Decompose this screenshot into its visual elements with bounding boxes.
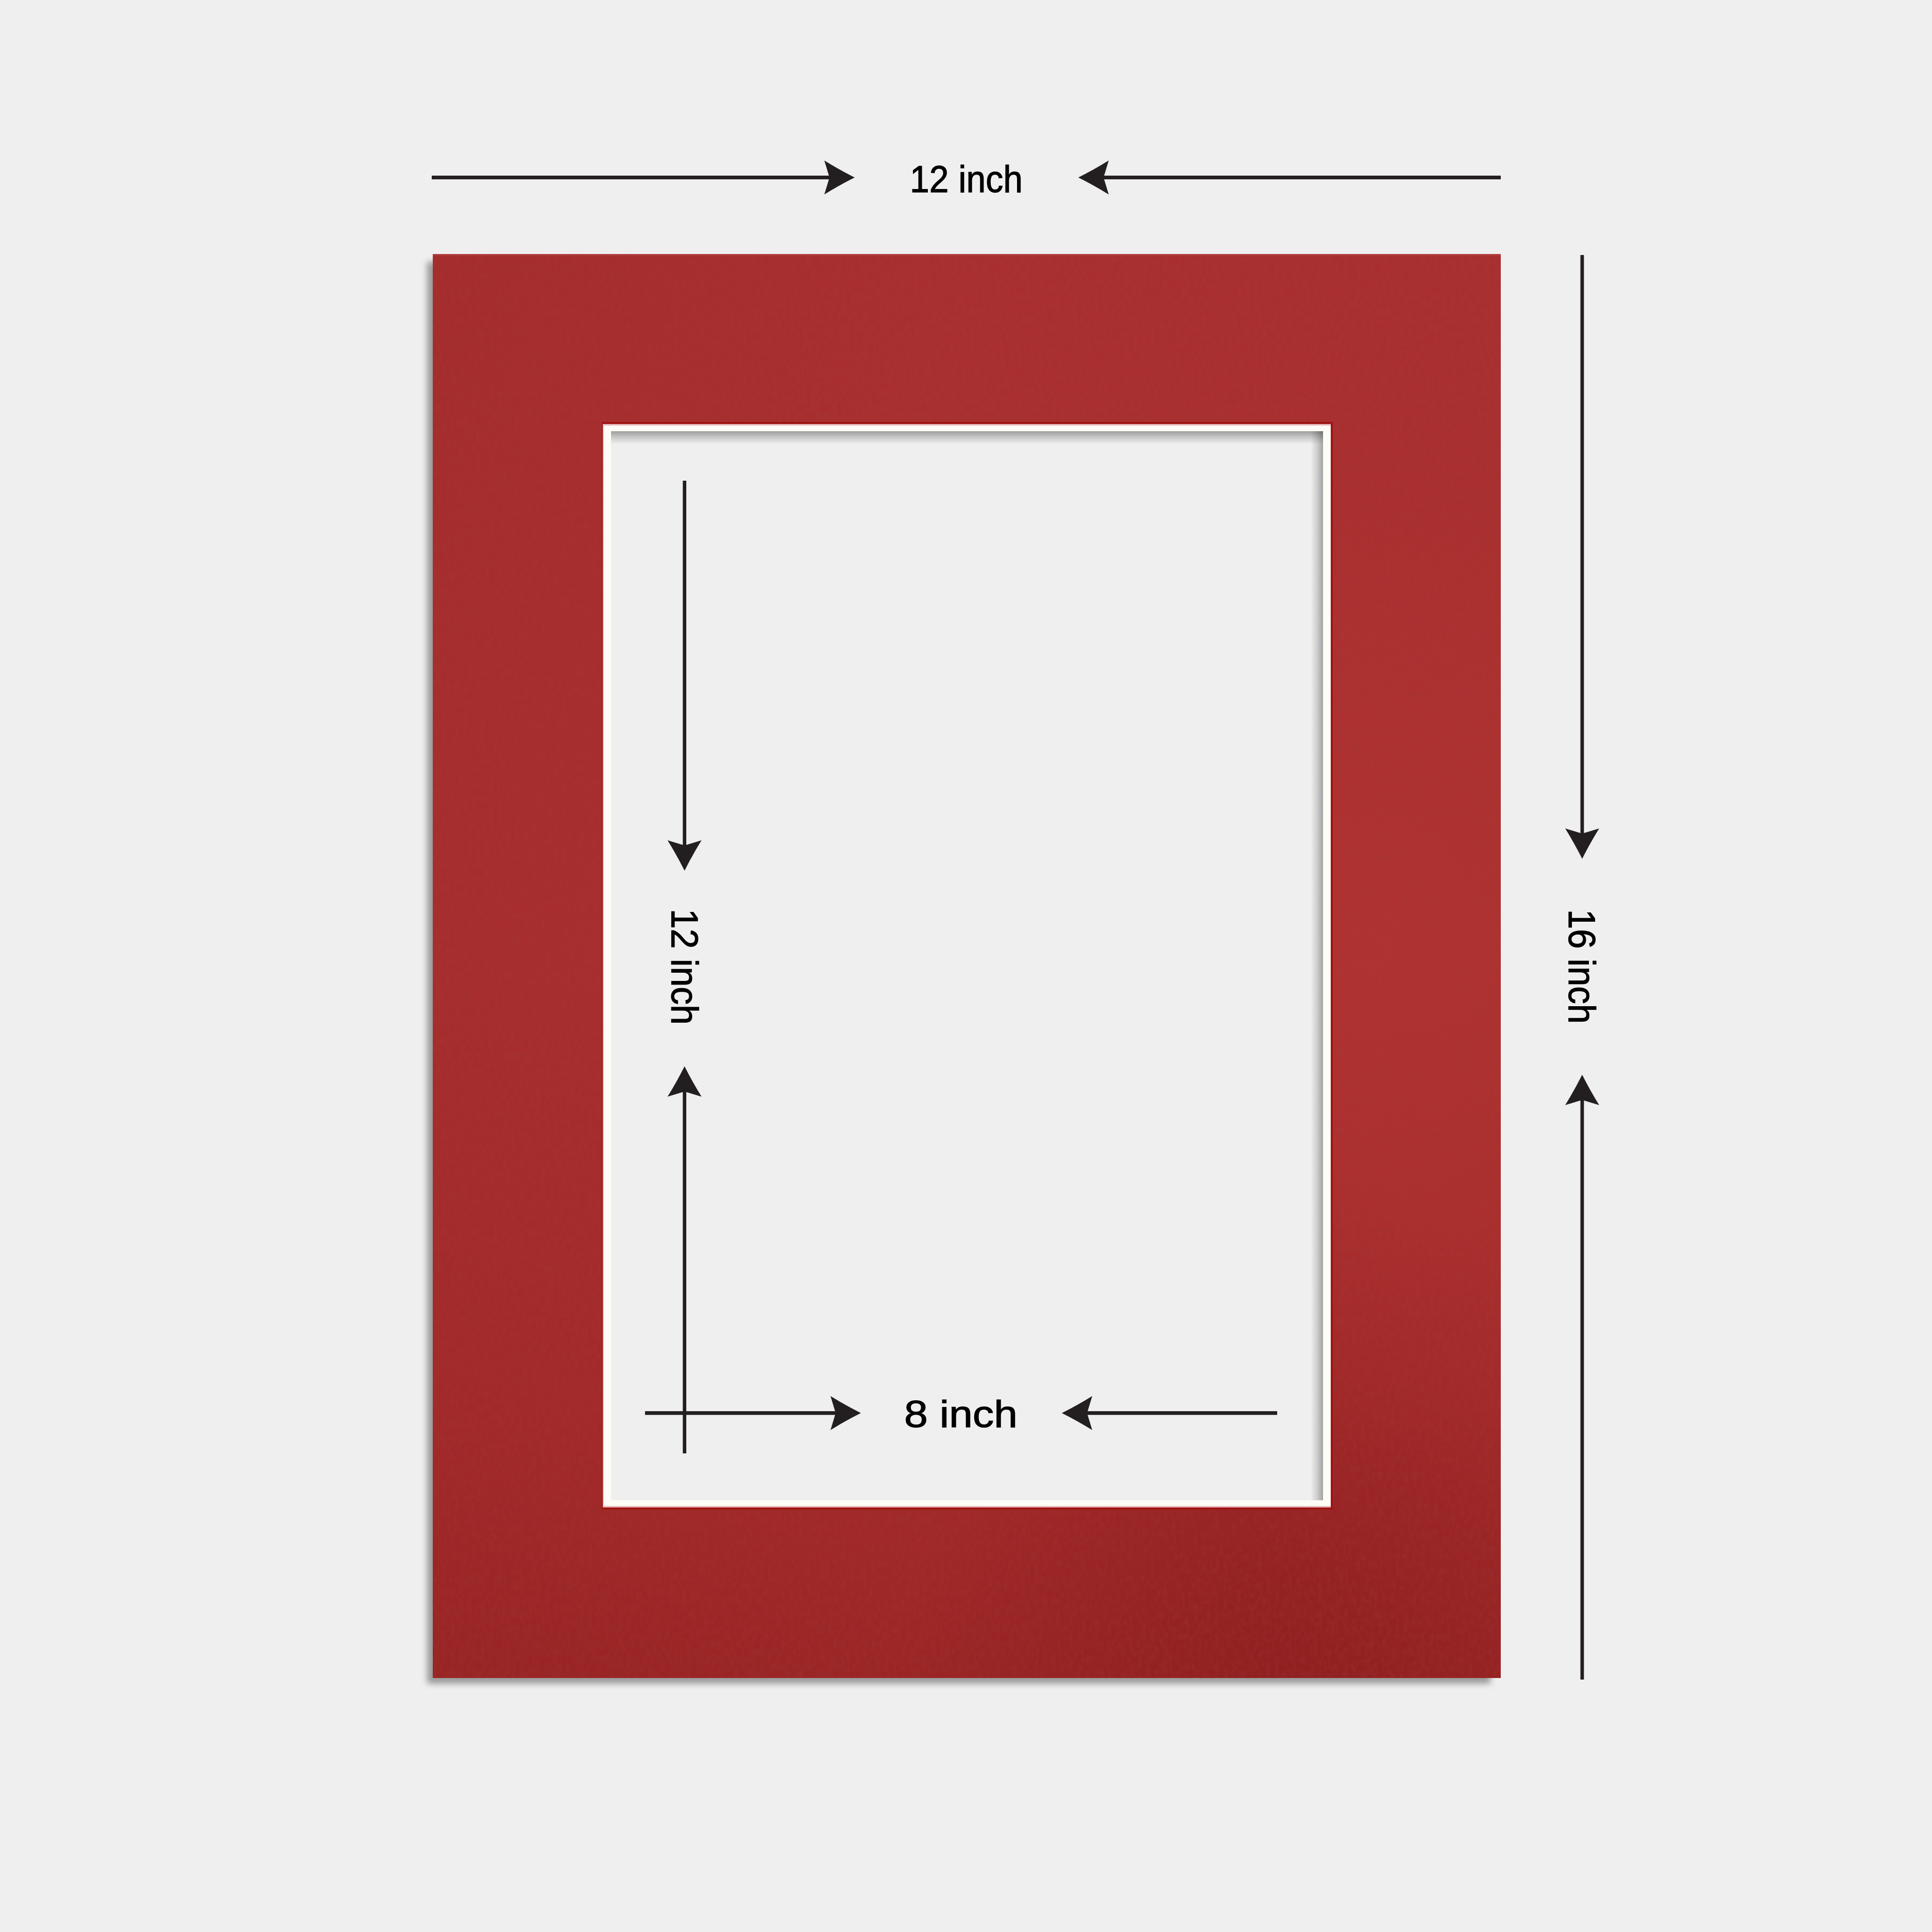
label: inner height 12 inch: 12 inch bbox=[664, 909, 705, 1025]
arrow: inner height, bottom side bbox=[668, 1066, 702, 1453]
label: outer height 16 inch: 16 inch bbox=[1561, 909, 1602, 1024]
arrow: inner height, top side bbox=[668, 481, 702, 871]
label: outer width 12 inch: 12 inch bbox=[910, 159, 1023, 200]
arrow: outer height, bottom side bbox=[1565, 1075, 1599, 1680]
arrow: outer height, top side bbox=[1565, 255, 1599, 859]
arrow: top width, right side bbox=[1078, 161, 1501, 195]
arrow: inner width, left side bbox=[645, 1396, 861, 1430]
label: inner width 8 inch: 8 inch bbox=[904, 1394, 1018, 1435]
mat drop shadow bbox=[427, 262, 1490, 1684]
panel: mat opening with bevel bbox=[602, 422, 1333, 1510]
panel: red mat board bbox=[433, 254, 1501, 1678]
arrow: top width, left side bbox=[432, 161, 855, 195]
arrow: inner width, right side bbox=[1062, 1396, 1277, 1430]
